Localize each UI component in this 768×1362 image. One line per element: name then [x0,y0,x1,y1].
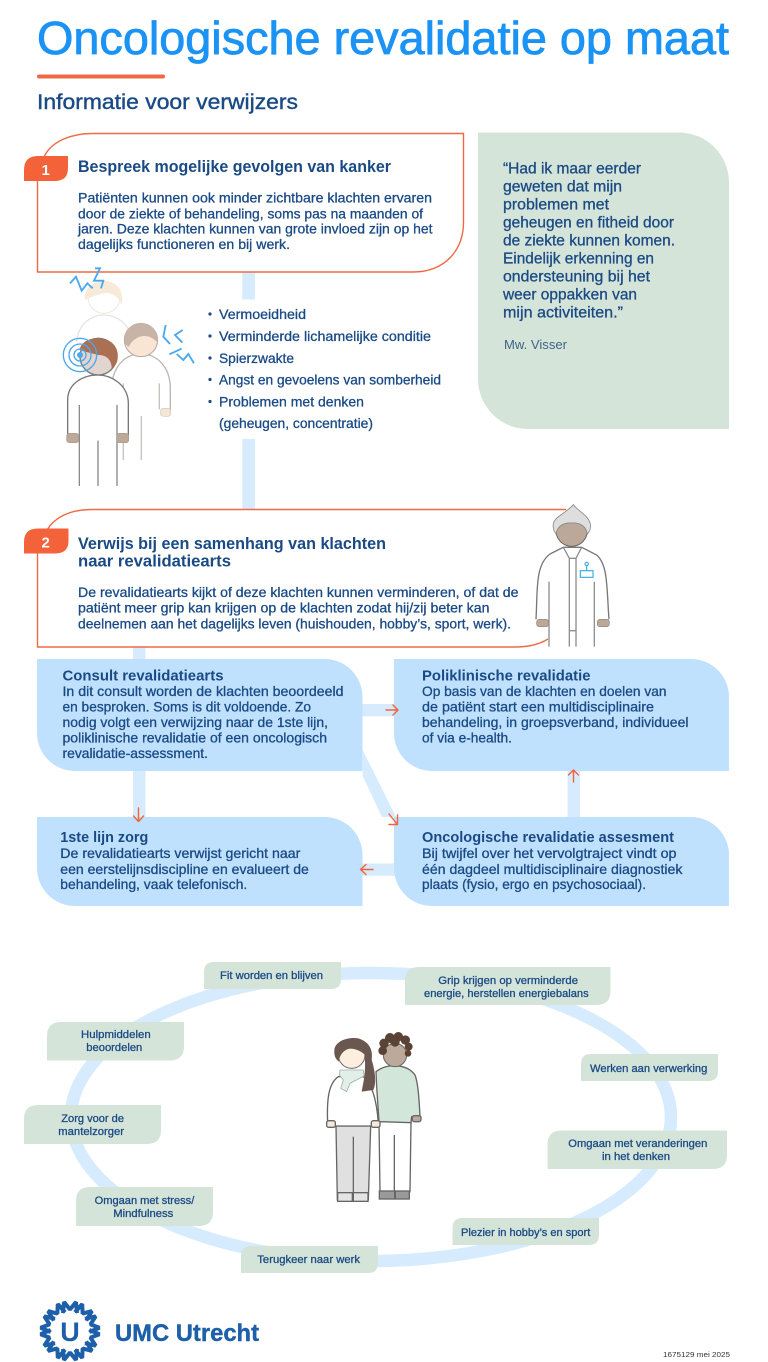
flow connectors [133,704,580,876]
box: 1ste lijn zorg: behandeling, vaak telefonisch. [60,877,247,892]
connector: step 1 to step 2 [133,272,255,660]
goals ring [71,973,671,1261]
label: terugkeer [241,1246,378,1273]
label: terugkeer: Terugkeer naar werk [257,1254,360,1266]
label: verwerking [581,1054,718,1081]
woman [327,1038,380,1201]
illustration: three patients with symptoms [63,268,194,486]
label: hulpmiddelen: Hulpmiddelen [81,1029,151,1041]
body step 1: jaren. Deze klachten kunnen van grote invloed zijn op het [77,221,433,237]
body step 1: door de ziekte of behandeling, soms pas na maanden of [78,205,423,221]
quote text [502,160,675,321]
box: 1ste lijn zorg: De revalidatiearts verwijst gericht naar [60,846,301,861]
box: poliklinische revalidatie: Poliklinische revalidatie [422,668,590,684]
box: 1ste lijn zorg: 1ste lijn zorg [60,830,148,846]
box: poliklinische revalidatie: of via e-health. [422,730,512,746]
body step 1 [77,190,433,252]
illustration: doctor [536,505,609,647]
label: verwerking: Werken aan verwerking [590,1063,707,1075]
label: grip: energie, herstellen energiebalans [424,988,589,1000]
label: mantelzorger: mantelzorger [58,1126,124,1138]
body step 2: patiënt meer grip kan krijgen op de klachten zodat hij/zij beter kan [78,600,490,616]
panel: step 2 [24,510,566,647]
logo wordmark: UMC Utrecht [115,1320,259,1347]
heading step 1: Bespreek mogelijke gevolgen van kanker [78,158,392,176]
label: hulpmiddelen [47,1022,184,1060]
panel: step 1 [24,134,464,272]
label: mantelzorger: Zorg voor de [61,1113,124,1125]
quote text: “Had ik maar eerder [503,160,641,177]
symptom list: Spierzwakte [219,350,294,366]
footer code: 1675129 mei 2025 [663,1350,730,1359]
box: consult revalidatiearts: en besproken. Soms is dit voldoende. Zo [62,700,311,714]
front person [67,338,129,486]
label: denken [548,1130,727,1169]
symptom list: Angst en gevoelens van somberheid [219,372,441,388]
icon: name badge [580,562,593,577]
panel: patient quote [478,132,729,429]
box: poliklinische revalidatie [394,659,729,771]
label: grip [405,967,610,1005]
quote text: mijn activiteiten.” [503,304,623,321]
badge 1: 1 [42,162,50,179]
badge 2 [24,528,68,554]
label: stress: Omgaan met stress/ [95,1195,195,1207]
box: poliklinische revalidatie: behandeling, in groepsverband, individueel [422,715,688,730]
label: fit worden [204,962,341,989]
icon: lightning bolts [70,268,194,363]
logo: UMC Utrecht: U [60,1317,80,1347]
box: poliklinische revalidatie: de patiënt start een multidisciplinaire [422,700,654,714]
icon: ringing circles [63,338,97,372]
quote attribution: Mw. Visser [504,337,568,352]
label: fit worden: Fit worden en blijven [220,970,323,982]
label: mantelzorger [24,1105,161,1144]
label: denken: Omgaan met veranderingen [568,1138,707,1150]
quote text: weer oppakken van [502,286,637,303]
body step 2: deelnemen aan het dagelijks leven (huishouden, hobby’s, sport, werk). [78,615,511,631]
label: grip: Grip krijgen op verminderde [438,975,578,987]
label: stress: Mindfulness [113,1208,174,1220]
label: denken: in het denken [602,1151,670,1163]
icon: sun emblem [40,1302,100,1360]
box: oncologische revalidatie assesment: plaats (fysio, ergo en psychosociaal). [422,877,646,892]
symptom list: Verminderde lichamelijke conditie [219,328,431,344]
quote text: ondersteuning bij het [503,268,651,285]
heading step 2: naar revalidatiearts [78,553,231,571]
box: consult revalidatiearts: Consult revalidatiearts [62,668,224,684]
man [376,1032,421,1199]
box: consult revalidatiearts: In dit consult worden de klachten beoordeeld [62,684,344,699]
quote text: geweten dat mijn [503,179,622,196]
box: poliklinische revalidatie: Op basis van de klachten en doelen van [422,684,666,699]
body step 2: De revalidatiearts kijkt of deze klachten kunnen verminderen, of dat de [78,584,519,600]
arrows [134,705,578,874]
box: oncologische revalidatie assesment: één dagdeel multidisciplinaire diagnostiek [422,862,682,877]
box: consult revalidatiearts: poliklinische revalidatie of een oncologisch [62,730,327,746]
badge 2: 2 [42,534,50,552]
badge 1 [24,156,68,181]
subtitle: Informatie voor verwijzers [37,91,298,114]
box: consult revalidatiearts [37,659,362,771]
body step 1: dagelijks functioneren en bij werk. [78,236,290,252]
label: plezier [452,1218,599,1245]
goal labels [24,962,727,1273]
box: 1ste lijn zorg [37,817,362,906]
quote text: de ziekte kunnen komen. [503,232,675,249]
body step 2 [78,584,519,631]
label: hulpmiddelen: beoordelen [86,1042,142,1054]
box: oncologische revalidatie assesment: Bij twijfel over het vervolgtraject vindt op [422,846,677,861]
title: Oncologische revalidatie op maat [37,12,729,64]
label: stress [76,1187,213,1226]
box: 1ste lijn zorg: een eerstelijnsdiscipline en evalueert de [60,862,309,877]
symptom list: Vermoeidheid [219,306,306,322]
symptom list [208,306,441,431]
box: oncologische revalidatie assesment: Oncologische revalidatie assesment [422,830,674,846]
label: plezier: Plezier in hobby’s en sport [461,1227,590,1239]
quote text: Eindelijk erkenning en [503,250,654,267]
symptom list: Problemen met denken [219,393,364,409]
body step 1: Patiënten kunnen ook minder zichtbare klachten ervaren [78,190,432,206]
heading step 2 [78,535,386,571]
heading step 2: Verwijs bij een samenhang van klachten [78,535,386,553]
faded back person [77,281,131,342]
box: consult revalidatiearts: revalidatie-assessment. [62,746,208,761]
illustration: couple [327,1032,421,1201]
box: oncologische revalidatie assesment [394,817,729,906]
middle person [113,323,171,460]
quote text: geheugen en fitheid door [503,215,674,232]
quote text: problemen met [503,197,610,214]
symptom list: (geheugen, concentratie) [219,415,373,431]
logo: UMC Utrecht [40,1302,259,1360]
box: consult revalidatiearts: nodig volgt een verwijzing naar de 1ste lijn, [62,715,328,730]
